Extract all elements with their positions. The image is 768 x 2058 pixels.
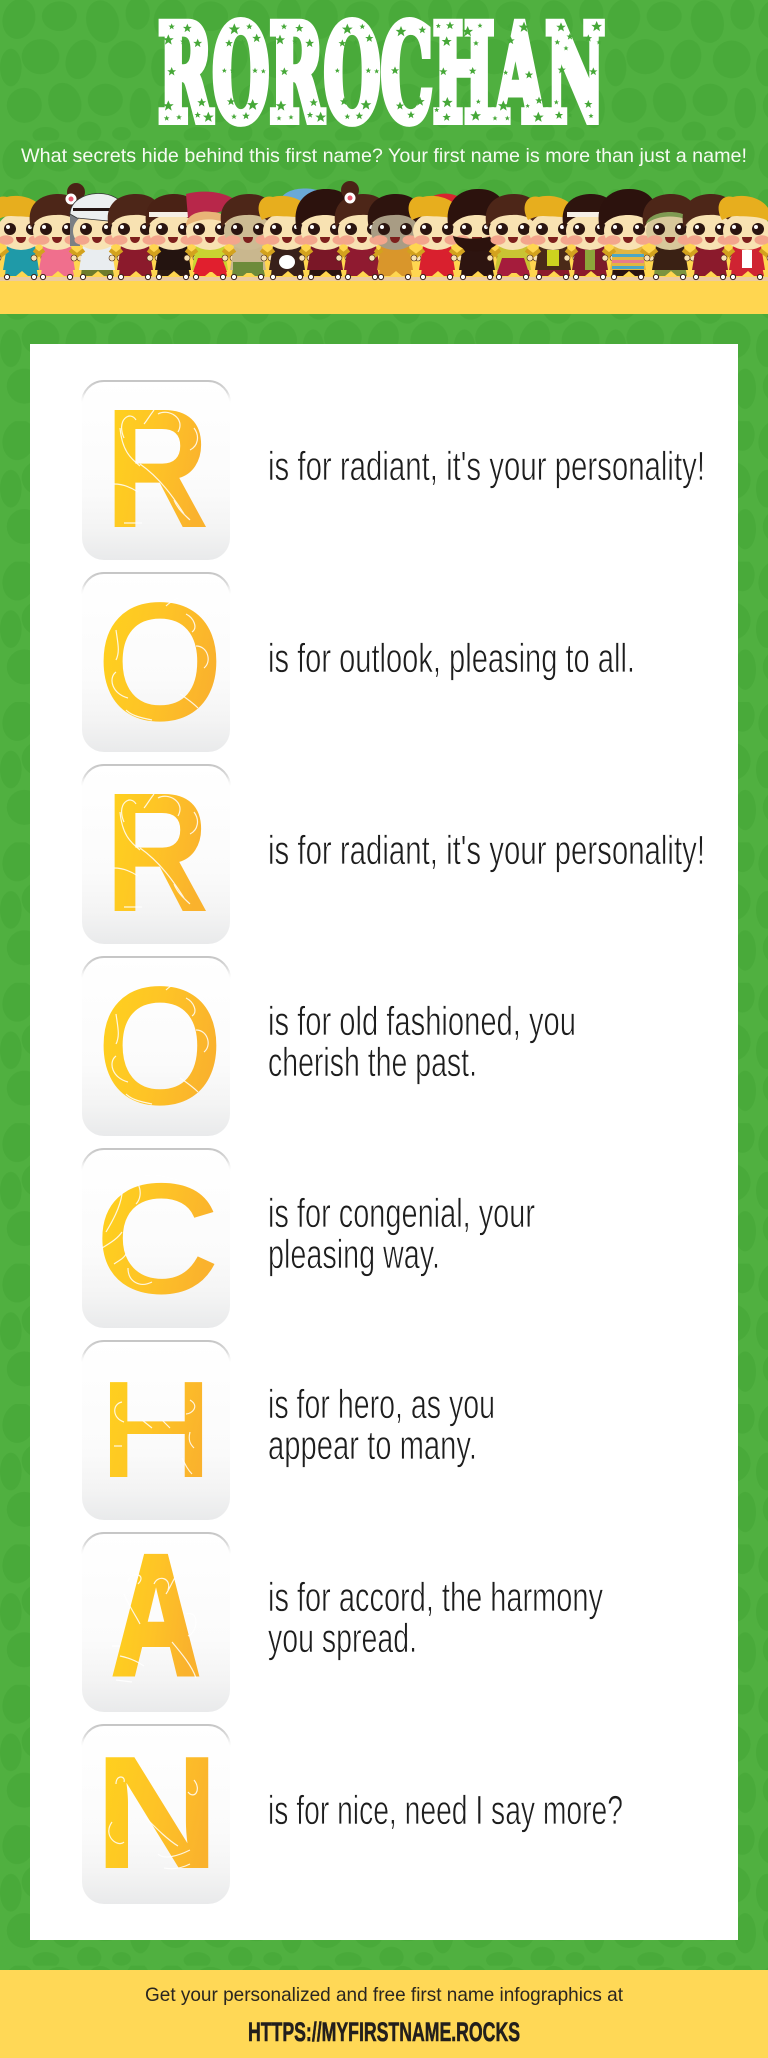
text: hero: appear to many. — [268, 1422, 477, 1468]
character: green woven hat — [643, 194, 697, 280]
character: blond with blue hat — [259, 188, 317, 280]
footer url: HTTPS://MYFIRSTNAME.ROCKS — [248, 2017, 520, 2047]
character: black beard — [448, 189, 507, 280]
text: congenial — [268, 1190, 535, 1277]
row: N nice — [82, 1723, 623, 1904]
letter tile: C: C — [96, 1154, 218, 1324]
text: old fashioned: is for old fashioned, you — [268, 998, 576, 1044]
character: blond in teal overalls — [0, 196, 48, 280]
character: maroon robe — [683, 194, 737, 280]
floor strip — [0, 277, 768, 281]
character: rainbow striped shirt — [599, 189, 658, 280]
row: R radiant second — [82, 758, 705, 948]
character: big dark hair, maroon suit — [296, 189, 355, 280]
panel: white card — [30, 344, 738, 1940]
text: old fashioned — [268, 998, 576, 1085]
subtitle: What secrets hide behind this first name? Your first name is more than just a name! — [21, 145, 747, 167]
text: accord — [268, 1574, 603, 1661]
footer band — [0, 1970, 768, 2058]
letter tile: O: O — [98, 570, 222, 753]
row: O outlook — [82, 570, 635, 753]
character: pink kimono with flower — [30, 183, 85, 280]
yellow band — [0, 240, 768, 314]
letter tile: N: N — [94, 1723, 220, 1903]
letter tile: O: O — [98, 954, 222, 1137]
row: C congenial — [82, 1148, 535, 1328]
character: blond with red dress — [409, 194, 465, 280]
character: darker skin, orange outfit — [368, 194, 422, 280]
text: nice: is for nice, need I say more? — [268, 1787, 623, 1833]
text: old fashioned: cherish the past. — [268, 1039, 477, 1085]
text: hero: is for hero, as you — [268, 1381, 495, 1427]
character: dark red robe — [108, 194, 162, 280]
text: hero — [268, 1381, 495, 1468]
text: accord: you spread. — [268, 1615, 417, 1661]
row: R radiant — [82, 374, 705, 564]
letter tile: H: H — [98, 1354, 214, 1505]
character: white headdress — [70, 193, 127, 280]
row: H hero — [82, 1340, 495, 1520]
footer text: Get your personalized and free first name infographics at — [145, 1984, 624, 2006]
character: red skirt and pink hat — [184, 192, 238, 280]
text: accord: is for accord, the harmony — [268, 1574, 603, 1620]
character: tan with grass skirt — [221, 194, 275, 280]
letter tile: R: R — [105, 758, 209, 948]
letter tile: R: R — [105, 374, 209, 564]
text: congenial: pleasing way. — [268, 1231, 440, 1277]
row: O old fashioned — [82, 954, 576, 1137]
character: black outfit with white band — [146, 194, 200, 280]
letter tile: A: A — [113, 1521, 199, 1709]
row: A accord — [82, 1521, 603, 1712]
character: maroon robe with white band — [563, 194, 617, 280]
text: congenial: is for congenial, your — [268, 1190, 535, 1236]
illustration: yellow band with row of cartoon characters — [0, 181, 768, 314]
character: flower bun, maroon robe — [335, 181, 389, 280]
character: blond with green vest — [525, 196, 580, 280]
character: yellow top, dotted skirt — [486, 194, 540, 280]
character: blond in red and white — [719, 196, 768, 280]
